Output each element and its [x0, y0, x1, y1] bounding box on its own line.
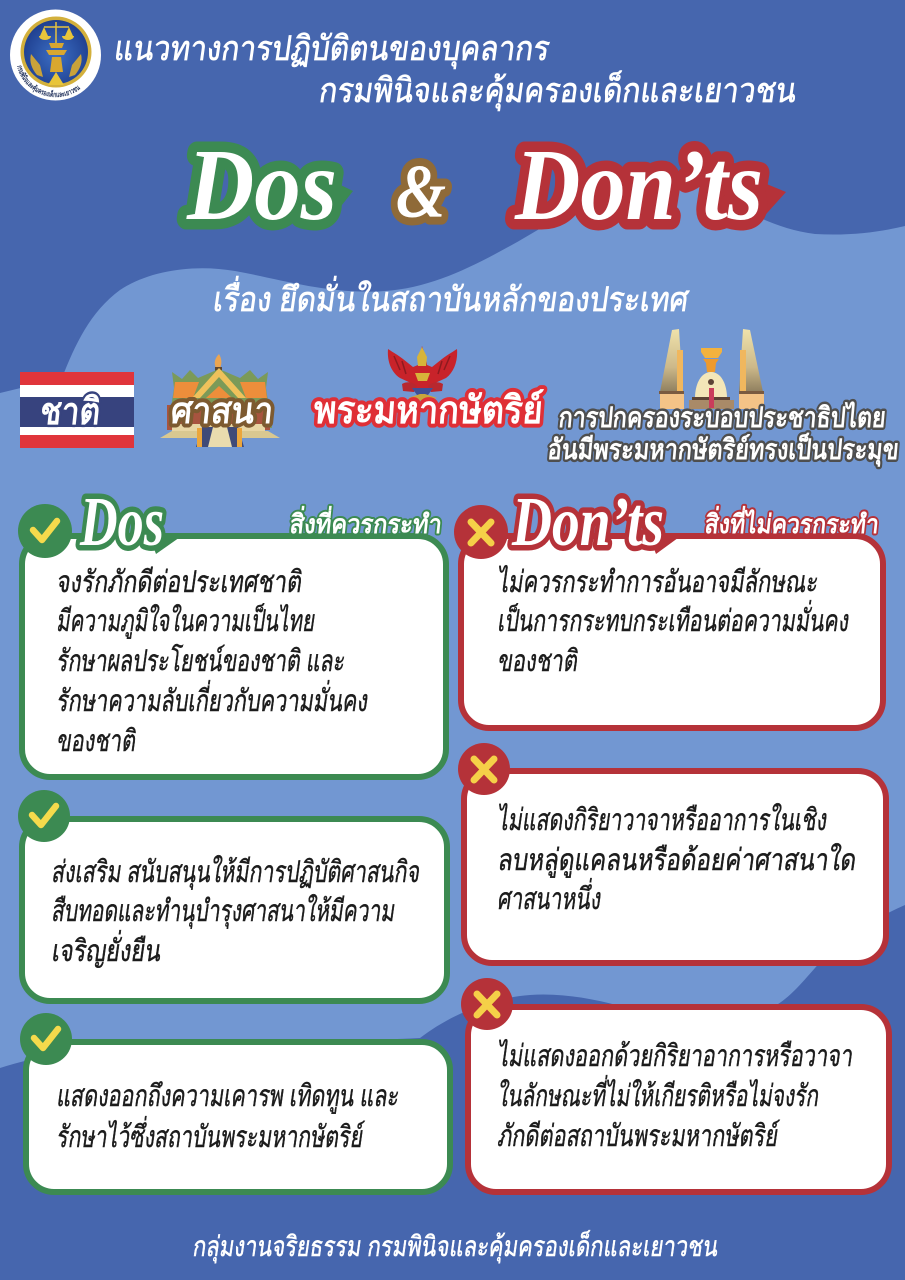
text block: ภักดีต่อสถาบันพระมหากษัตริย์ — [496, 1119, 781, 1153]
icon: check badge — [18, 504, 72, 558]
heading: ampersand: & — [396, 150, 446, 234]
text block: เจริญยั่งยืน — [50, 930, 164, 968]
panel: do 3 — [20, 1013, 450, 1192]
logo: department emblem — [10, 10, 101, 100]
text block: ส่งเสริม สนับสนุนให้มีการปฏิบัติศาสนกิจ — [50, 854, 423, 891]
icon: cross badge — [458, 743, 510, 795]
heading: Dos: Dos — [186, 129, 337, 242]
icon: cross badge — [454, 505, 508, 559]
text block: ของชาติ — [55, 725, 139, 758]
logo: department emblem: กรมพินิจและคุ้มครองเด็กและเยาวชน — [17, 65, 80, 98]
text block — [495, 564, 852, 678]
text block: มีความภูมิใจในความเป็นไทย — [55, 602, 318, 639]
text block — [55, 566, 371, 758]
panel: do 1 — [18, 484, 446, 777]
text block — [55, 1080, 402, 1154]
icon: democracy monument with label — [546, 329, 900, 467]
label: should do: สิ่งที่ควรกระทำ — [288, 505, 444, 539]
text block: สืบทอดและทำนุบำรุงศาสนาให้มีความ — [50, 893, 398, 930]
icon: check badge — [20, 1013, 72, 1065]
title: แนวทางการปฏิบัติตนของบุคลากร — [112, 30, 552, 69]
icon: temple with religion label: ศาสนา — [169, 390, 275, 431]
icon: cross badge — [461, 978, 513, 1030]
title — [112, 30, 800, 111]
text block — [495, 802, 859, 916]
footer: กลุ่มงานจริยธรรม กรมพินิจและคุ้มครองเด็กและเยาวชน — [191, 1229, 721, 1264]
heading: Dos: Dos — [79, 484, 164, 561]
panel: don't 2 — [458, 743, 886, 963]
icon: garuda with monarchy label — [312, 346, 544, 432]
text block: รักษาความลับเกี่ยวกับความมั่นคง — [55, 680, 371, 718]
text block: ของชาติ — [496, 645, 581, 678]
text block: จงรักภักดีต่อประเทศชาติ — [55, 566, 305, 599]
text block: รักษาไว้ซึ่งสถาบันพระมหากษัตริย์ — [55, 1116, 366, 1154]
panel: don't 3 — [461, 978, 889, 1192]
icon: temple with religion label — [160, 354, 280, 447]
text block — [495, 1038, 856, 1153]
icon: Thai flag with nation label: ชาติ — [38, 390, 103, 432]
title: กรมพินิจและคุ้มครองเด็กและเยาวชน — [317, 69, 800, 111]
text block: ศาสนาหนึ่ง — [496, 878, 604, 916]
heading: Don'ts: Don’ts — [514, 129, 763, 242]
icon: check badge — [18, 790, 70, 842]
text block: รักษาผลประโยชน์ของชาติ และ — [55, 643, 348, 678]
panel: don't 1 — [454, 484, 883, 728]
text block — [50, 854, 423, 968]
icon: garuda with monarchy label: พระมหากษัตริย์ — [312, 389, 544, 432]
heading: Don'ts: Don’ts — [511, 484, 664, 561]
subtitle: เรื่อง ยึดมั่นในสถาบันหลักของประเทศ — [211, 276, 692, 319]
label: should not do: สิ่งที่ไม่ควรกระทำ — [703, 505, 881, 539]
text block: แสดงออกถึงความเคารพ เทิดทูน และ — [55, 1080, 402, 1114]
panel: do 2 — [18, 790, 447, 1001]
icon: Thai flag with nation label — [20, 372, 134, 448]
